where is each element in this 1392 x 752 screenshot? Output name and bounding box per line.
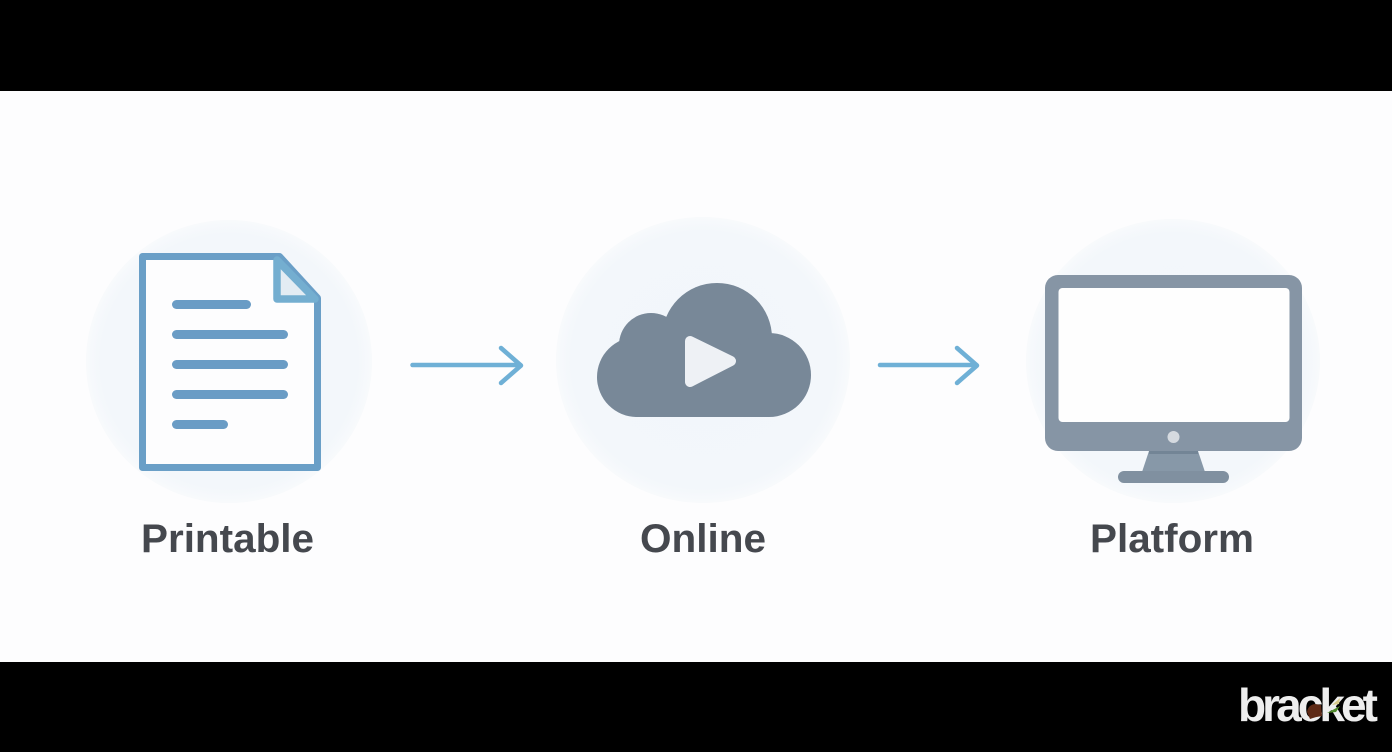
label: Printable: Printable [141,517,314,561]
background circle: online [556,217,850,503]
monitor base [1118,471,1229,483]
monitor stand [1142,451,1205,472]
bottom black band [0,662,1392,752]
background circle: printable [86,220,372,503]
background circle: platform [1026,219,1320,503]
arrow: printable to online [412,348,521,383]
icon: document [142,256,318,468]
label: Platform: Platform [1090,517,1254,561]
step 2: online [556,217,850,561]
monitor body [1045,275,1302,451]
arrow: online to platform [880,348,977,383]
step 1: printable [86,220,372,561]
monitor screen [1058,288,1290,422]
logo: bracket: bracket [1238,679,1378,731]
play triangle [690,341,731,382]
label: Online: Online [640,517,766,561]
icon: monitor [1045,275,1302,483]
top black band [0,0,1392,91]
power dot [1168,431,1180,443]
main white panel [0,91,1392,662]
step 3: platform [1026,219,1320,561]
icon: cloud with play button [597,283,811,417]
